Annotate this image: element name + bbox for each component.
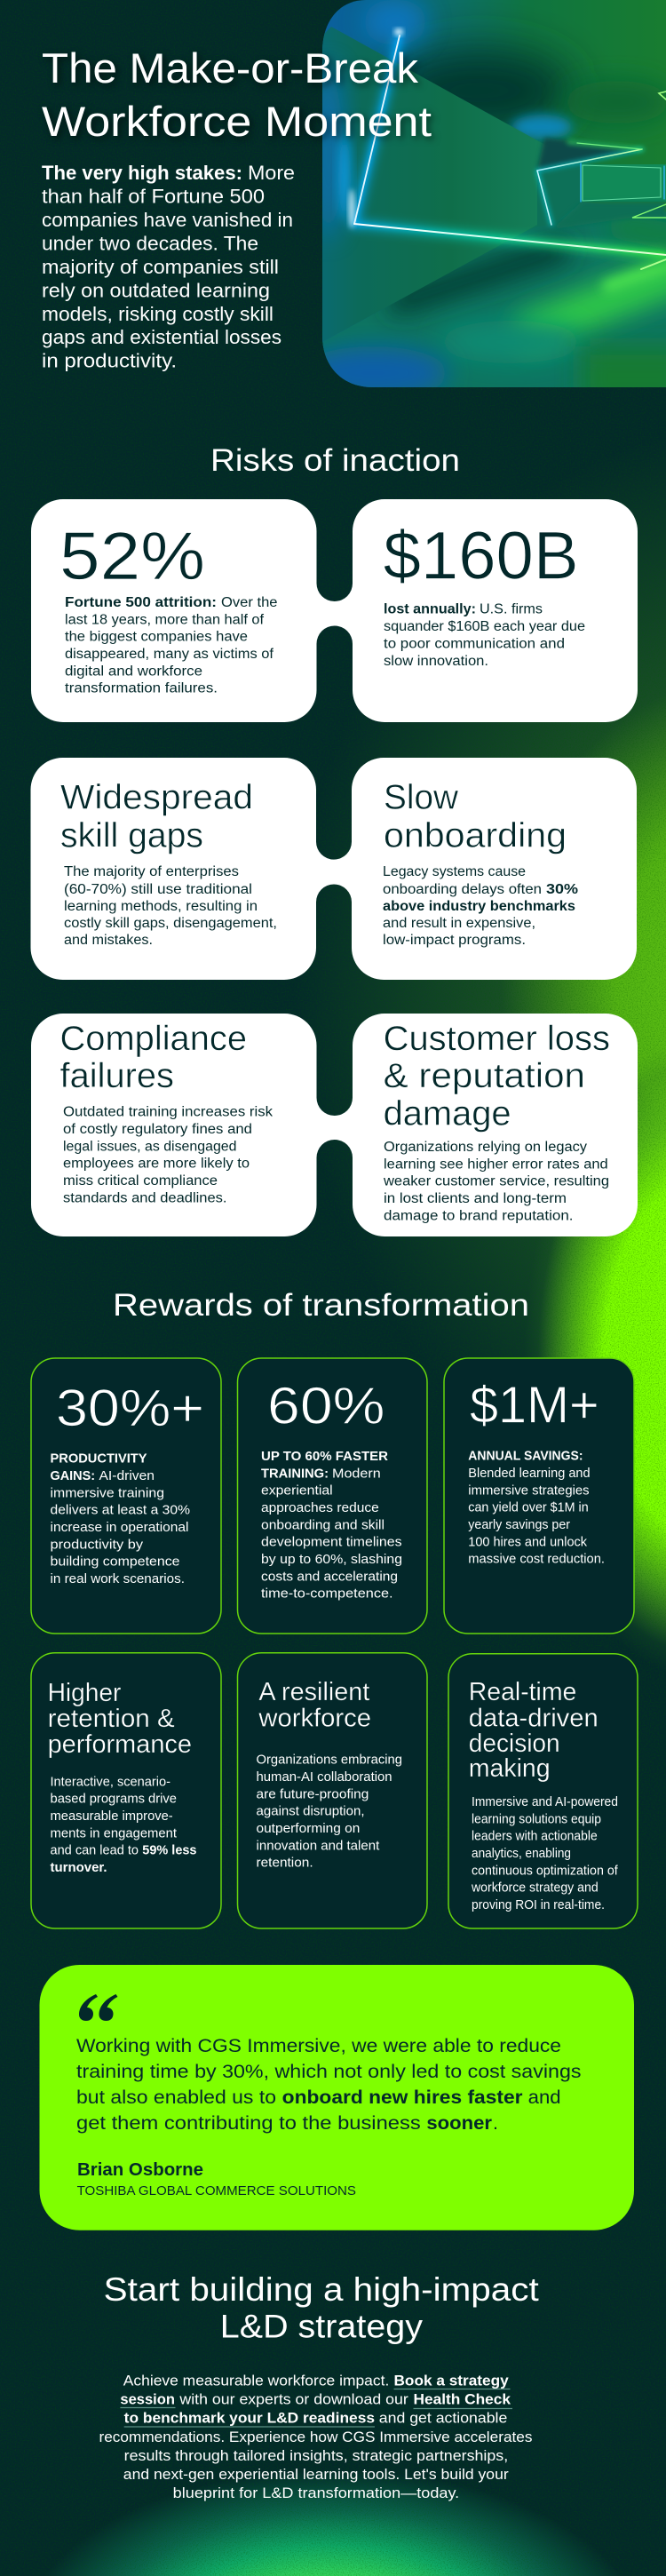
card: compliance failures: standards and deadlines. [63,1190,227,1205]
panel: a resilient workforce: Organizations embracing [256,1753,402,1768]
panel: 60% faster training: experiential [261,1483,333,1499]
card: customer loss and reputation damage: & reputation [384,1057,585,1095]
call to action paragraph: Achieve measurable workforce impact. [123,2373,389,2389]
panel: higher retention and performance: Interactive, scenario- [50,1774,170,1789]
heading: call to action: L&D strategy [220,2309,424,2345]
card: slow onboarding: and result in expensive, [383,916,535,931]
card: widespread skill gaps: The majority of enterprises [64,864,239,879]
intro paragraph: The very high stakes: [42,162,242,184]
panel: risks row 2 [30,758,637,980]
card: slow onboarding [383,778,578,948]
panel: 60% faster training: 60% [267,1378,385,1435]
panel: 30%+ productivity gains: GAINS: [50,1468,95,1483]
panel: higher retention and performance: turnover. [50,1860,107,1875]
card: customer loss and reputation damage: weaker customer service, resulting [383,1174,609,1189]
card: $160B lost annually [384,519,585,669]
panel: 30%+ productivity gains: 30%+ [56,1379,204,1437]
panel: a resilient workforce: innovation and talent [256,1838,380,1853]
panel: $1M+ annual savings: massive cost reduction. [468,1552,605,1567]
card: 52% Fortune 500 attrition: Over the [221,595,277,610]
intro paragraph: models, risking costly skill [42,303,274,325]
call to action paragraph: with our experts or download our [178,2391,408,2408]
panel: higher retention and performance: measurable improve- [50,1809,173,1824]
call to action paragraph: Health Check [414,2391,511,2408]
panel: higher retention and performance: 59% less [142,1843,197,1858]
panel: 30%+ productivity gains: PRODUCTIVITY [50,1451,147,1467]
quote text: but also enabled us to [76,2087,276,2108]
panel: 60% faster training [238,1358,427,1634]
intro paragraph: gaps and existential losses [42,326,281,348]
panel: 60% faster training: TRAINING: [261,1466,329,1481]
call to action paragraph: Book a strategy [394,2373,509,2389]
panel: higher retention and performance: and can lead to [50,1843,139,1858]
card: 52% Fortune 500 attrition [59,519,277,696]
panel: real-time data-driven decision making: leaders with actionable [472,1829,598,1844]
intro paragraph: More [248,162,295,184]
panel: 60% faster training: time-to-competence. [261,1586,393,1602]
panel: $1M+ annual savings: can yield over $1M in [468,1500,589,1515]
panel: $1M+ annual savings: yearly savings per [468,1517,570,1532]
card: widespread skill gaps: costly skill gaps, disengagement, [64,916,277,931]
panel: 60% faster training: by up to 60%, slashing [261,1552,402,1567]
call to action paragraph: blueprint for L&D transformation—today. [173,2485,459,2501]
intro paragraph: companies have vanished in [42,209,293,231]
panel: 30%+ productivity gains: in real work scenarios. [50,1571,185,1586]
card: customer loss and reputation damage: Customer loss [384,1020,610,1058]
card: widespread skill gaps: (60-70%) still use traditional [64,882,252,897]
card: widespread skill gaps: learning methods, resulting in [64,899,258,914]
quote text: training time by 30%, which not only led to cost savings [76,2061,581,2082]
panel: real-time data-driven decision making: making [469,1754,551,1783]
card: compliance failures [60,1020,273,1205]
card: 52% Fortune 500 attrition: Fortune 500 attrition: [65,595,217,610]
panel: 60% faster training: development timelines [261,1535,402,1550]
card: widespread skill gaps [60,778,277,948]
panel: real-time data-driven decision making: Real-time [469,1678,576,1706]
card: 52% Fortune 500 attrition: last 18 years, more than half of [65,613,265,627]
card: widespread skill gaps: skill gaps [60,817,203,855]
card: $160B lost annually: to poor communication and [384,637,565,652]
quote attribution: TOSHIBA GLOBAL COMMERCE SOLUTIONS [77,2183,356,2198]
quote text [76,2035,581,2134]
card: slow onboarding: Slow [384,778,459,816]
card: widespread skill gaps: and mistakes. [64,933,153,948]
quote text: Working with CGS Immersive, we were able to reduce [76,2035,561,2056]
hero image: neon corridor [322,0,666,387]
card: compliance failures: of costly regulatory fines and [63,1122,252,1137]
heading: rewards of transformation: Rewards of transformation [113,1288,529,1323]
card: slow onboarding: onboarding [384,817,567,855]
panel: 30%+ productivity gains: immersive training [50,1485,164,1500]
panel: $1M+ annual savings: ANNUAL SAVINGS: [468,1449,583,1464]
panel: real-time data-driven decision making: workforce strategy and [471,1880,599,1896]
card: slow onboarding: Legacy systems cause [383,864,526,879]
card: customer loss and reputation damage: Organizations relying on legacy [384,1140,587,1155]
card: customer loss and reputation damage: damage [384,1095,511,1133]
card: $160B lost annually: lost annually: [384,602,476,617]
panel: a resilient workforce: against disruption, [256,1804,364,1819]
panel: 30%+ productivity gains [31,1358,221,1634]
card: compliance failures: Compliance [60,1020,247,1058]
card: slow onboarding: above industry benchmarks [383,899,575,914]
panel: a resilient workforce: retention. [256,1856,313,1871]
intro paragraph: than half of Fortune 500 [42,185,265,208]
panel: higher retention and performance: retention & [48,1705,175,1733]
icon: quotation mark [79,1994,117,2021]
panel: a resilient workforce: A resilient [258,1678,369,1706]
panel: a resilient workforce [238,1653,427,1928]
panel: real-time data-driven decision making: analytics, enabling [472,1846,571,1861]
panel: a resilient workforce: are future-proofing [256,1786,369,1801]
card: $160B lost annually: slow innovation. [384,654,488,669]
card: widespread skill gaps: Widespread [60,778,253,816]
intro paragraph: majority of companies still [42,256,279,278]
panel: customer quote [39,1965,634,2230]
call to action paragraph: results through tailored insights, strategic partnerships, [124,2447,508,2464]
intro paragraph [42,162,295,372]
panel: 60% faster training: costs and accelerating [261,1569,398,1584]
quote text: onboard new hires faster [282,2087,523,2108]
panel: a resilient workforce: workforce [258,1704,371,1732]
card: 52% Fortune 500 attrition: digital and workforce [65,664,202,679]
panel: 30%+ productivity gains: productivity by [50,1537,144,1552]
heading: call to action: Start building a high-impact [104,2271,539,2308]
call to action paragraph: recommendations. Experience how CGS Immersive accelerates [99,2429,533,2445]
panel: $1M+ annual savings: $1M+ [470,1377,599,1435]
card: compliance failures: miss critical compliance [63,1173,218,1189]
card: compliance failures: employees are more likely to [63,1157,250,1172]
card: 52% Fortune 500 attrition: disappeared, many as victims of [65,647,274,662]
call to action paragraph: and next-gen experiential learning tools. Let's build your [123,2466,509,2483]
title: The Make-or-Break [42,44,419,91]
panel: risks row 3 [31,1014,638,1236]
card: customer loss and reputation damage [383,1020,610,1223]
card: 52% Fortune 500 attrition: 52% [59,519,205,594]
card: compliance failures: legal issues, as disengaged [63,1139,236,1154]
call to action paragraph: session [120,2391,175,2408]
card: slow onboarding: low-impact programs. [383,933,526,948]
card: customer loss and reputation damage: learning see higher error rates and [384,1157,608,1172]
quote text: and [528,2087,561,2108]
panel: 30%+ productivity gains: increase in operational [50,1520,188,1535]
panel: higher retention and performance: performance [48,1730,192,1759]
panel: 30%+ productivity gains: AI-driven [99,1468,155,1483]
panel: real-time data-driven decision making: decision [469,1729,560,1758]
panel: a resilient workforce: human-AI collaboration [256,1769,392,1785]
title [42,44,432,145]
panel: real-time data-driven decision making: data-driven [469,1704,599,1732]
panel: higher retention and performance: based programs drive [50,1792,177,1807]
card: 52% Fortune 500 attrition: the biggest companies have [65,630,248,645]
heading: risks of inaction: Risks of inaction [210,443,460,478]
card: slow onboarding: onboarding delays often [383,882,542,897]
card: 52% Fortune 500 attrition: transformation failures. [65,681,218,696]
panel: risks row 1 [31,499,638,722]
panel: 30%+ productivity gains: building competence [50,1554,179,1570]
panel: a resilient workforce: outperforming on [256,1821,360,1836]
panel: real-time data-driven decision making: proving ROI in real-time. [472,1897,605,1912]
card: customer loss and reputation damage: in lost clients and long-term [384,1191,567,1206]
quote attribution: Brian Osborne [77,2160,203,2180]
intro paragraph: under two decades. The [42,232,258,254]
card: compliance failures: Outdated training increases risk [63,1105,273,1120]
card: compliance failures: failures [60,1057,174,1095]
panel: $1M+ annual savings [444,1358,634,1634]
panel: real-time data-driven decision making: continuous optimization of [472,1863,618,1878]
card: slow onboarding: 30% [546,882,578,897]
intro paragraph: in productivity. [42,350,177,372]
intro paragraph: rely on outdated learning [42,279,270,301]
panel: 60% faster training: onboarding and skill [261,1517,385,1532]
quote text: . [493,2112,498,2134]
card: customer loss and reputation damage: damage to brand reputation. [384,1208,574,1223]
quote text: sooner [426,2112,493,2134]
panel: 60% faster training: Modern [332,1466,381,1481]
panel: higher retention and performance [31,1653,221,1928]
call to action paragraph: and get actionable [379,2410,507,2427]
card: $160B lost annually: U.S. firms [480,602,543,617]
card: $160B lost annually: $160B [384,519,579,593]
call to action paragraph [99,2373,533,2501]
title: Workforce Moment [42,98,432,145]
panel: $1M+ annual savings: Blended learning and [468,1466,591,1481]
panel: real-time data-driven decision making: Immersive and AI-powered [472,1794,618,1809]
panel: 60% faster training: approaches reduce [261,1500,379,1515]
heading: call to action [104,2271,539,2345]
call to action paragraph: to benchmark your L&D readiness [124,2410,375,2427]
panel: real-time data-driven decision making [448,1654,638,1928]
quote text: get them contributing to the business [76,2112,421,2134]
panel: higher retention and performance: Higher [48,1679,122,1707]
panel: 30%+ productivity gains: delivers at least a 30% [50,1503,190,1518]
panel: 60% faster training: UP TO 60% FASTER [261,1449,388,1464]
card: $160B lost annually: squander $160B each year due [384,619,585,634]
panel: $1M+ annual savings: immersive strategies [468,1483,590,1498]
quote attribution [77,2160,356,2198]
panel: real-time data-driven decision making: learning solutions equip [472,1811,601,1826]
panel: higher retention and performance: ments in engagement [50,1825,178,1841]
panel: $1M+ annual savings: 100 hires and unlock [468,1534,587,1549]
